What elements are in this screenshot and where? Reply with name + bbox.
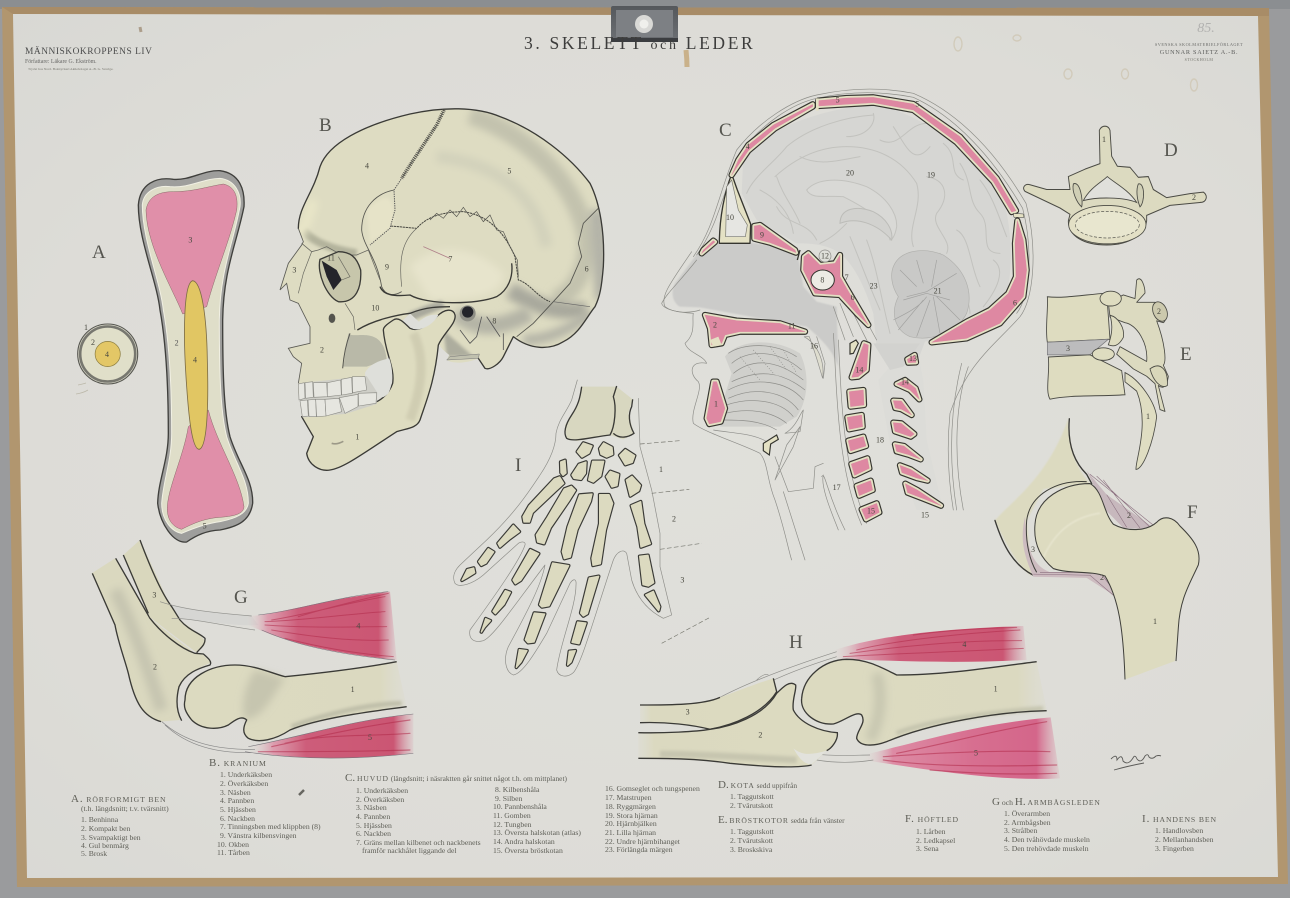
legend A: 2. Kompakt ben — [81, 824, 130, 833]
figure C: sagittal section of the head: 1 — [714, 400, 718, 409]
ear canal — [329, 305, 476, 323]
legend C: 5. Hjässben — [356, 821, 392, 830]
legend E — [718, 814, 845, 854]
figure letters and numbers D, E, F: 2 — [1100, 573, 1104, 582]
hanging metal clip — [611, 6, 678, 42]
figure E: thoracic vertebrae from the left — [1046, 279, 1170, 469]
figure C: sagittal section of the head: 20 — [846, 169, 854, 178]
legend C: 18. Ryggmärgen — [605, 802, 656, 811]
legend G and H — [992, 796, 1101, 853]
legend F: 2. Ledkapsel — [916, 836, 955, 845]
figure I: hand skeleton: 1 — [659, 465, 663, 474]
legend I — [1142, 813, 1217, 853]
legend C: 17. Matstrupen — [605, 793, 652, 802]
figure letters and numbers D, E, F: 1 — [1102, 135, 1106, 144]
legend C: 2. Överkäksben — [356, 795, 404, 804]
figure H: elbow extended: 4 — [962, 640, 966, 649]
legend A: 5. Brosk — [81, 849, 107, 858]
legend B — [209, 757, 321, 857]
legend A — [71, 793, 169, 858]
hand outline — [454, 380, 672, 676]
figure B: skull side view: 11 — [327, 254, 335, 263]
legend F: 3. Sena — [916, 844, 939, 853]
legend C — [345, 772, 700, 855]
figure C: sagittal section of the head: 2 — [713, 321, 717, 330]
figure letters and numbers D, E, F: 2 — [1127, 511, 1131, 520]
legend A: 4. Gul benmärg — [81, 841, 129, 850]
figure letters and numbers D, E, F: 1 — [1153, 617, 1157, 626]
carpal bones and phalanges — [462, 443, 660, 667]
figure A: tubular bone longitudinal section: 5 — [203, 522, 207, 531]
legend I: 3. Fingerben — [1155, 844, 1194, 853]
figure C: sagittal section of the head: 19 — [927, 170, 935, 179]
figure C: sagittal section of the head: 14 — [901, 377, 909, 386]
publisher, top right: 85. — [1197, 21, 1215, 36]
figure letter B: B — [319, 115, 332, 136]
legend I: 2. Mellanhandsben — [1155, 835, 1214, 844]
figure I: hand skeleton: 3 — [680, 576, 684, 585]
figure letters and numbers D, E, F: 3 — [1031, 545, 1035, 554]
nasal cavity — [673, 243, 838, 367]
figure G: elbow bent: 2 — [153, 662, 157, 671]
skull and vertebrae bone sections — [702, 97, 1027, 519]
legend B: 9. Vänstra kilbensvingen — [220, 831, 297, 840]
tongue — [713, 342, 807, 442]
figure B: skull side view: 1 — [355, 432, 359, 441]
legend C: 12. Tungben — [493, 820, 532, 829]
skull: cranium and face — [280, 109, 604, 393]
legend G and H: 2. Armbågsben — [1004, 818, 1051, 827]
cerebellum — [892, 251, 969, 338]
figure C: sagittal section of the head: 13 — [909, 354, 917, 363]
figure H: elbow extended: 5 — [974, 749, 978, 758]
figure I: hand skeleton: 2 — [672, 515, 676, 524]
figure letter C: C — [719, 120, 732, 141]
figure C: sagittal section of the head: 14 — [855, 365, 863, 374]
figure C: sagittal section of the head — [662, 89, 1033, 560]
figure B: skull side view: 6 — [585, 264, 589, 273]
legend G and H: 4. Den tvåhövdade muskeln — [1004, 835, 1090, 844]
humerus — [802, 659, 1047, 745]
figure B: skull side view: 4 — [365, 161, 369, 170]
figure letters and numbers D, E, F — [1031, 135, 1198, 626]
figure C: sagittal section of the head: 15 — [921, 510, 929, 519]
ulna — [638, 683, 837, 767]
legend A: 1. Benhinna — [81, 815, 119, 824]
figure B: skull side view: 10 — [371, 304, 379, 313]
legend C: 19. Stora hjärnan — [605, 811, 658, 820]
legend D — [718, 779, 797, 810]
legend C: 14. Andra halskotan — [493, 837, 555, 846]
radius and ulna — [565, 386, 634, 441]
figure G: elbow bent: 3 — [152, 591, 156, 600]
figure C: sagittal section of the head: 4 — [746, 142, 750, 151]
legend C: 3. Näsben — [356, 803, 387, 812]
legend D: 2. Tvärutskott — [730, 801, 774, 810]
title: 3. SKELETT och LEDER — [524, 33, 755, 53]
legend C: 8. Kilbenshåla — [495, 785, 540, 794]
legend C: framför nackhålet liggande del — [362, 846, 457, 855]
legend B: 1. Underkäksben — [220, 770, 272, 779]
figure letter H: H — [789, 632, 803, 653]
radius — [640, 678, 777, 729]
figure H: elbow extended: 3 — [686, 708, 690, 717]
artist signature — [1111, 755, 1161, 770]
ulna — [92, 558, 211, 722]
legend B: 4. Pannben — [220, 796, 254, 805]
series heading, top left — [25, 45, 152, 71]
series heading, top left: MÄNNISKOKROPPENS LIV — [25, 45, 152, 57]
dashed divisions — [640, 441, 710, 643]
figure B: skull side view: 7 — [448, 255, 452, 264]
legend C: 11. Gomben — [493, 811, 531, 820]
legend B: 5. Hjässben — [220, 805, 256, 814]
figure letters and numbers D, E, F: 3 — [1066, 344, 1070, 353]
legend C: 4. Pannben — [356, 812, 390, 821]
figure C: sagittal section of the head: 5 — [915, 100, 919, 109]
figure A: tubular bone cross-section: 2 — [91, 338, 95, 347]
legend E: 3. Broskskiva — [730, 845, 773, 854]
figure C: sagittal section of the head: 10 — [726, 213, 734, 222]
soft tissue contour — [662, 89, 1033, 560]
brain mass — [742, 105, 1011, 510]
legend C: 15. Översta bröstkotan — [493, 846, 563, 855]
frontal bone lower part and sinus — [719, 174, 751, 243]
muscle 5 — [810, 717, 1060, 779]
legend E: E. BRÖSTKOTOR sedda från vänster — [718, 814, 845, 826]
figure C: sagittal section of the head: 6 — [1013, 299, 1017, 308]
eye orbit — [319, 252, 361, 302]
figure B: skull side view: 3 — [292, 265, 296, 274]
figure G: elbow bent: 1 — [351, 685, 355, 694]
legend C: 6. Nackben — [356, 829, 391, 838]
muscle 5 — [160, 714, 413, 758]
legend C: 10. Pannbenshåla — [493, 802, 547, 811]
figure letters and numbers D, E, F: E — [1180, 344, 1192, 365]
legend C: 9. Silben — [495, 794, 522, 803]
tendon of muscle 4 — [160, 602, 255, 630]
legend G and H: 1. Överarmben — [1004, 809, 1050, 818]
figure C: sagittal section of the head: 16 — [810, 341, 818, 350]
figure A: tubular bone cross-section: 4 — [105, 350, 109, 359]
figure D: vertebra from above — [1024, 126, 1206, 245]
legend G and H: 3. Strålben — [1004, 826, 1037, 835]
legend A: A. RÖRFORMIGT BEN — [71, 793, 166, 805]
foxing stains and marks — [140, 27, 1198, 795]
figure A: tubular bone longitudinal section: 3 — [188, 236, 192, 245]
legend C: 1. Underkäksben — [356, 786, 408, 795]
legend E: 1. Taggutskott — [730, 827, 775, 836]
figure C: sagittal section of the head: 12 — [821, 251, 829, 260]
legend F: 1. Lårben — [916, 827, 946, 836]
legend C: 7. Gräns mellan kilbenet och nackbenets — [356, 838, 481, 847]
figure G: elbow bent: 4 — [356, 622, 360, 631]
publisher, top right — [1155, 21, 1243, 62]
radius — [123, 540, 206, 653]
figure H: elbow extended — [638, 626, 1060, 779]
figure C: sagittal section of the head: 8 — [820, 275, 824, 284]
figure H: elbow extended: 2 — [758, 730, 762, 739]
figure B: skull side view: 2 — [320, 345, 324, 354]
legend B: 10. Okben — [217, 840, 249, 849]
teeth — [298, 376, 377, 417]
legend C: 13. Översta halskotan (atlas) — [493, 828, 581, 837]
legend D: D. KOTA sedd uppifrån — [718, 779, 797, 791]
legend C: 21. Lilla hjärnan — [605, 828, 656, 837]
figure C: sagittal section of the head: 5 — [836, 95, 840, 104]
corpus callosum — [807, 180, 897, 333]
figure letters and numbers D, E, F: 1 — [1146, 412, 1150, 421]
hole beneath the cheekbone — [365, 358, 392, 397]
legend D: 1. Taggutskott — [730, 792, 775, 801]
figure G: elbow bent — [92, 540, 413, 758]
legend C: 23. Förlängda märgen — [605, 845, 673, 854]
legend B: 11. Tårben — [217, 848, 250, 857]
legend A: (t.h. längdsnitt; t.v. tvärsnitt) — [81, 804, 169, 813]
figure C: sagittal section of the head: 17 — [833, 483, 841, 492]
skull sutures — [298, 110, 598, 350]
figure letters and numbers D, E, F: 2 — [1192, 193, 1196, 202]
figure A: tubular bone longitudinal section — [138, 171, 253, 542]
humerus — [184, 662, 407, 741]
legend A: 3. Svampaktigt ben — [81, 833, 141, 842]
zygomatic arch — [357, 307, 450, 330]
figure C: sagittal section of the head: 23 — [870, 281, 878, 290]
legend G and H: 5. Den trehövdade muskeln — [1004, 844, 1089, 853]
figure A: tubular bone cross-section: 1 — [84, 323, 88, 332]
legend B: 3. Näsben — [220, 788, 251, 797]
figure F: hip joint — [995, 419, 1199, 680]
legend C: 20. Hjärnbjälken — [605, 819, 657, 828]
legend I: I. HANDENS BEN — [1142, 813, 1217, 825]
figure B: skull side view — [280, 109, 604, 470]
legend F — [905, 813, 959, 853]
figure C: sagittal section of the head: 11 — [788, 321, 796, 330]
figure I: hand skeleton — [454, 380, 710, 676]
legend B: 7. Tinningsben med klippben (8) — [220, 822, 321, 831]
figure G: elbow bent: 5 — [368, 733, 372, 742]
legend C: C. HUVUD (längdsnitt; i näsraktten går snittet något t.h. om mittplanet) — [345, 772, 568, 784]
legend B: 6. Nackben — [220, 814, 255, 823]
hole beneath the arch — [413, 315, 438, 329]
figure letter I: I — [515, 455, 521, 476]
publisher, top right: STOCKHOLM — [1185, 58, 1213, 62]
legend E: 2. Tvärutskott — [730, 836, 774, 845]
series heading, top left: Tryckt hos Nord. Boktryckeri Aktiebolaget A.-B. G. Sverige. — [28, 67, 114, 71]
legend B: 2. Överkäksben — [220, 779, 268, 788]
cerebral folds — [747, 113, 1007, 313]
figure C: sagittal section of the head: 18 — [876, 435, 884, 444]
legend C: 16. Gomseglet och tungspenen — [605, 784, 700, 793]
muscle 4 — [160, 592, 397, 660]
figure C: sagittal section of the head: 15 — [867, 506, 875, 515]
figure A: tubular bone cross-section — [76, 323, 138, 394]
legend G and H: G och H. ARMBÅGSLEDEN — [992, 796, 1101, 808]
figure letters and numbers D, E, F: 2 — [1157, 307, 1161, 316]
legend C: 22. Undre hjärnbihanget — [605, 837, 681, 846]
series heading, top left: Författare: Läkare G. Ekström. — [25, 58, 97, 65]
publisher, top right: GUNNAR SAIETZ A.-B. — [1160, 49, 1238, 56]
figure C: sagittal section of the head: 9 — [760, 230, 764, 239]
figure A: tubular bone longitudinal section: 4 — [193, 356, 197, 365]
figure B: skull side view: 5 — [507, 166, 511, 175]
legend B: B. KRANIUM — [209, 757, 267, 769]
figure letter A: A — [92, 242, 106, 263]
figure C: sagittal section of the head: 6 — [851, 293, 855, 302]
publisher, top right: SVENSKA SKOLMATERIELFÖRLAGET — [1155, 42, 1243, 47]
muscle 4 — [720, 626, 1027, 707]
figure A: tubular bone longitudinal section: 2 — [175, 339, 179, 348]
figure H: elbow extended: 1 — [994, 684, 998, 693]
figure C: sagittal section of the head: 7 — [845, 273, 849, 282]
figure letters and numbers D, E, F: F — [1187, 502, 1198, 523]
figure letters and numbers D, E, F: D — [1164, 140, 1178, 161]
mandible — [302, 310, 455, 470]
legend F: F. HÖFTLED — [905, 813, 959, 825]
figure B: skull side view: 9 — [385, 262, 389, 271]
figure letter G: G — [234, 587, 248, 608]
figure C: sagittal section of the head: 21 — [934, 286, 942, 295]
figure B: skull side view: 8 — [492, 316, 496, 325]
legend I: 1. Handlovsben — [1155, 826, 1203, 835]
